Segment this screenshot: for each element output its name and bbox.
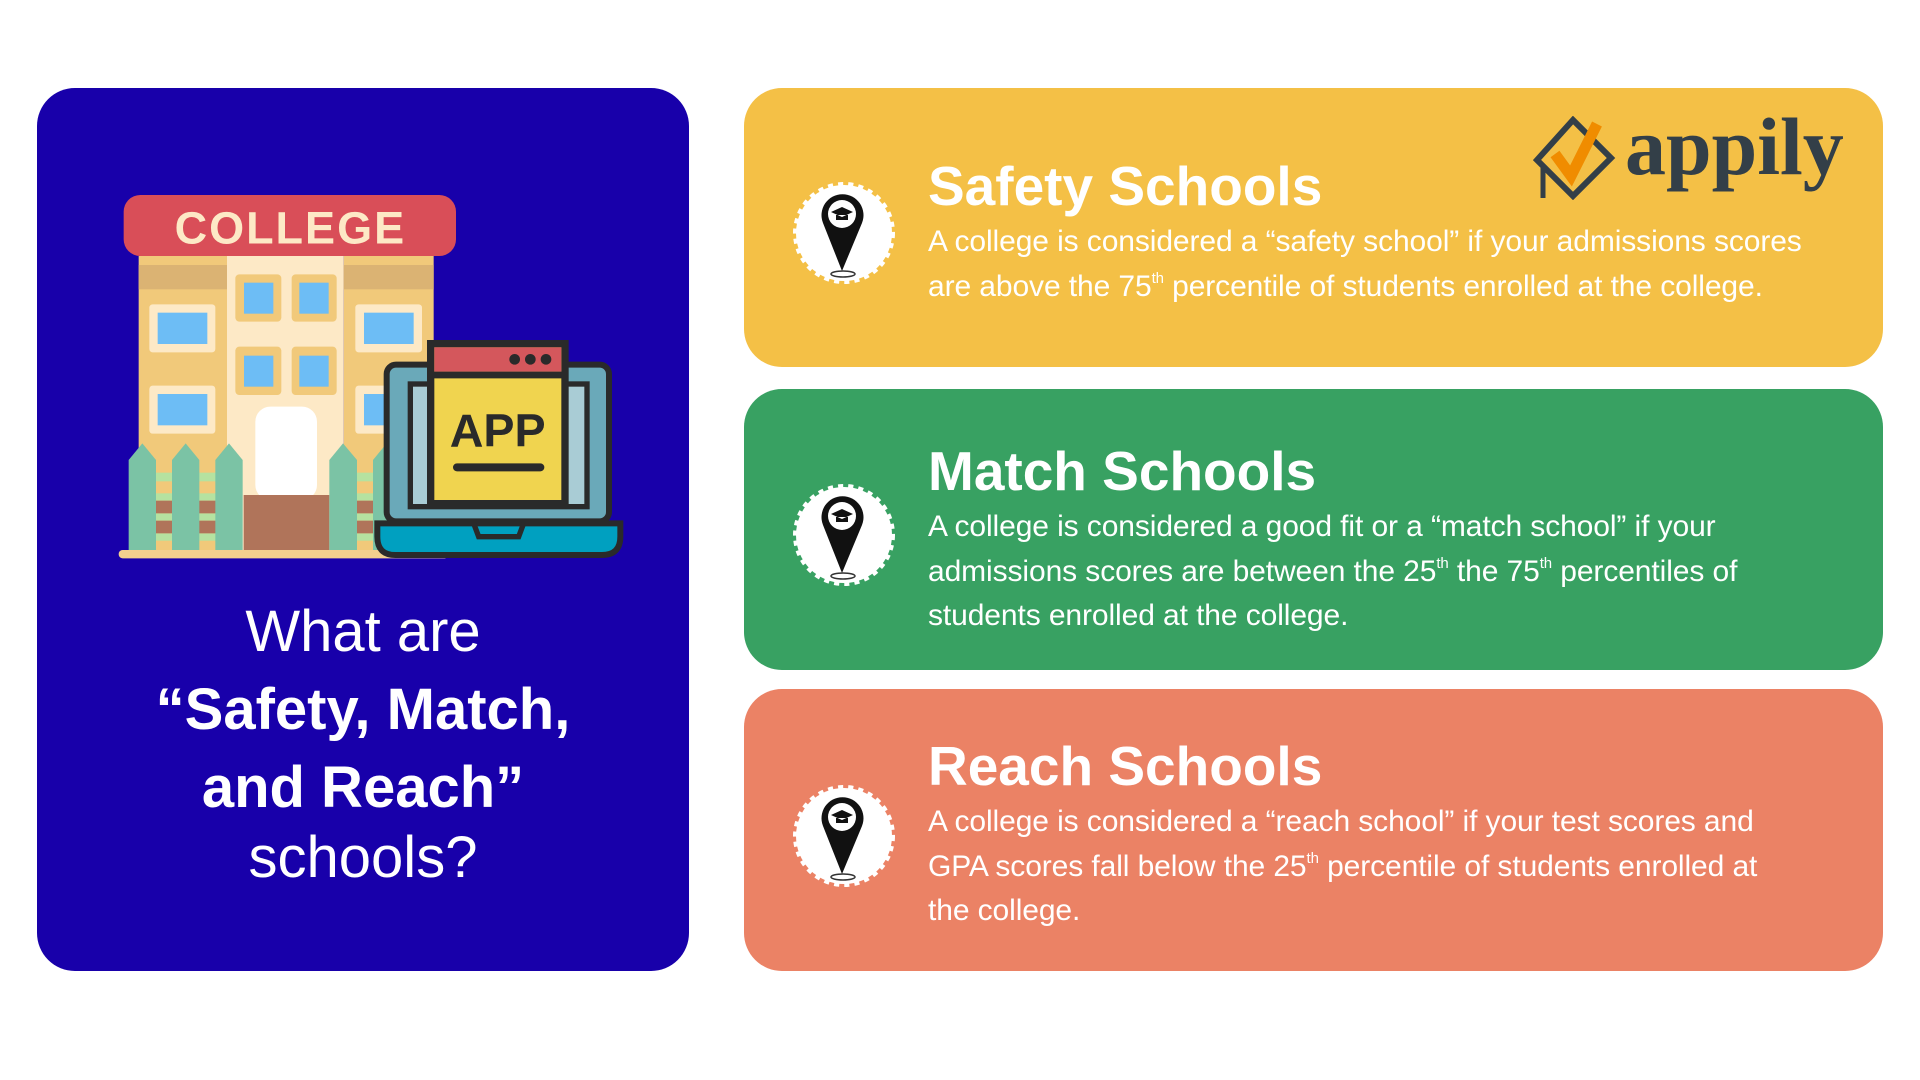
text: safety description (928, 225, 1802, 302)
panel: left blue (37, 88, 689, 971)
text: match description: students enrolled at the college. (928, 599, 1348, 632)
text: reach description (928, 805, 1758, 927)
heading: reach: Reach Schools (928, 735, 1322, 797)
heading: left question: “Safety, Match, (156, 677, 570, 742)
text: match description (928, 510, 1738, 632)
text: reach description: GPA scores fall below the 25th percentile of students enrolled at (928, 850, 1757, 882)
text: match description: admissions scores are between the 25th the 75th percentiles of (928, 554, 1737, 588)
text: match description: A college is considered a good fit or a “match school” if your (928, 510, 1716, 543)
heading: left question: What are (245, 599, 481, 664)
panel: reach schools (744, 689, 1883, 971)
heading: match: Match Schools (928, 440, 1316, 502)
heading: safety: Safety Schools (928, 155, 1322, 217)
logo: appily: appily (1625, 101, 1844, 192)
illustration: college and app laptop (118, 195, 624, 558)
panel: match schools (744, 389, 1883, 670)
icon: location badge (793, 484, 895, 586)
text: reach description: the college. (928, 894, 1080, 927)
heading: left question: schools? (249, 825, 477, 890)
heading: left question: and Reach” (202, 755, 524, 820)
heading: left question (156, 599, 570, 890)
panel: safety schools (744, 88, 1883, 367)
text: reach description: A college is considered a “reach school” if your test scores and (928, 805, 1754, 838)
illustration: college and app laptop: APP (450, 405, 546, 457)
text: safety description: A college is considered a “safety school” if your admissions scores (928, 225, 1802, 258)
text: safety description: are above the 75th percentile of students enrolled at the college. (928, 270, 1763, 302)
icon: location badge (793, 182, 895, 284)
illustration: college and app laptop: COLLEGE (175, 202, 406, 253)
logo: appily (1533, 101, 1844, 200)
icon: location badge (793, 785, 895, 887)
